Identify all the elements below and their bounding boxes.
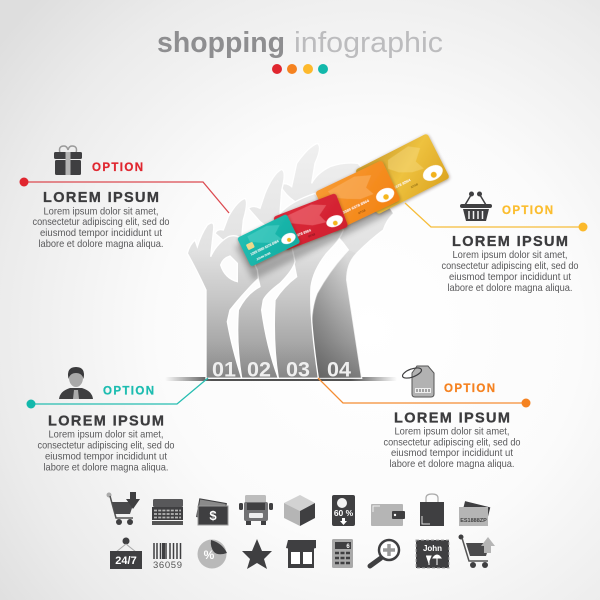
- panel: option orange: OPTION: [444, 383, 495, 395]
- hand 4: [280, 143, 393, 378]
- panel: option red: Lorem ipsum dolor sit amet,: [44, 206, 158, 218]
- icon: credit cards: [459, 501, 490, 526]
- icon: door hanger discount: 60 %: [334, 508, 354, 518]
- shading behind cards: [234, 199, 393, 282]
- panel: option teal: LOREM IPSUM: [48, 414, 164, 430]
- hands holding cards: [187, 143, 403, 378]
- icon: barcode: [153, 543, 182, 571]
- icon: cart with down arrow: [106, 492, 140, 525]
- icon: parcel label: John: [423, 544, 442, 553]
- icon: gift: [54, 146, 82, 175]
- icon: cart with up arrow: [458, 534, 495, 568]
- icon: parcel label: [416, 540, 449, 568]
- icon: banknotes: $: [209, 508, 217, 523]
- card 1 teal: [237, 214, 300, 267]
- card 4 yellow: 07/18: [410, 182, 419, 189]
- hand 2: [215, 198, 295, 378]
- card 3 orange: 1265 5589 6378 8564: [332, 198, 370, 219]
- panel: option orange: consectetur adipiscing elit, sed do: [384, 438, 521, 448]
- panel: option red: LOREM IPSUM: [43, 190, 159, 206]
- panel: option orange: eiusmod tempor incididunt ut: [391, 448, 513, 459]
- icon: cash register: [152, 499, 183, 525]
- panel: option teal: OPTION: [103, 386, 154, 398]
- step numbers: 01: [212, 358, 236, 382]
- panel: option teal: consectetur adipiscing elit, sed do: [38, 440, 175, 452]
- panel: option red: [20, 146, 229, 250]
- panel: option yellow: eiusmod tempor incididunt ut: [449, 272, 571, 283]
- icon: star: [242, 539, 272, 569]
- panel: option orange: LOREM IPSUM: [394, 410, 510, 426]
- icon: shopping bag: [420, 494, 444, 526]
- hand 3: [248, 169, 343, 378]
- icon row 2: [110, 534, 495, 571]
- icon: basket: [460, 192, 492, 221]
- card 3 orange: 07/18: [358, 208, 366, 215]
- card 3 orange: [315, 160, 401, 232]
- icon: door hanger discount: [332, 495, 355, 526]
- panel: option yellow: Lorem ipsum dolor sit amet,: [452, 250, 568, 261]
- hand 4 arm shading: [312, 250, 362, 378]
- panel: option red: consectetur adipiscing elit, sed do: [32, 217, 170, 228]
- card 2 red: 6378 8564: [295, 228, 312, 238]
- icon: truck: [239, 495, 273, 525]
- icon: shop: [286, 540, 316, 568]
- icon: calculator: [332, 539, 353, 568]
- panel: option orange: labore et dolore magna aliqua.: [390, 459, 514, 470]
- panel: option teal: [26, 367, 208, 474]
- icon: businessman: [59, 367, 93, 399]
- icon: banknotes: [197, 499, 228, 525]
- panel: option yellow: LOREM IPSUM: [452, 234, 568, 250]
- icon: percent sticker: %: [204, 548, 215, 562]
- panel: option yellow: [405, 192, 588, 294]
- card 4 yellow: 6378 8564: [392, 177, 412, 190]
- panel: option red: eiusmod tempor incididunt ut: [40, 228, 162, 239]
- icon: credit cards: ES1888ZP: [460, 518, 487, 524]
- title: [157, 27, 443, 59]
- panel: option yellow: labore et dolore magna aliqua.: [448, 283, 572, 294]
- icon: 24/7 sign: [110, 538, 142, 569]
- panel: option teal: Lorem ipsum dolor sit amet,: [48, 430, 164, 440]
- card 4 yellow: [355, 133, 450, 215]
- icon row 1: [106, 492, 490, 526]
- ground shadow: [165, 377, 397, 381]
- step numbers: [212, 358, 351, 382]
- step numbers: 02: [247, 358, 271, 382]
- icon: price tag: [401, 366, 434, 397]
- icon: 24/7 sign: 24/7: [115, 555, 137, 567]
- panel: option red: labore et dolore magna aliqua.: [38, 239, 164, 250]
- panel: option teal: labore et dolore magna aliqua.: [44, 462, 168, 474]
- card 2 red: [273, 193, 348, 251]
- panel: option orange: [318, 366, 530, 470]
- title: infographic: [294, 27, 443, 59]
- card 1 teal: 1265 5589 6378 8564: [250, 239, 280, 256]
- panel: option orange: Lorem ipsum dolor sit amet,: [394, 426, 510, 438]
- icon: box: [284, 495, 315, 526]
- title: shopping: [157, 27, 285, 59]
- panel: option teal: eiusmod tempor incididunt ut: [45, 452, 167, 462]
- icon: barcode: 36059: [153, 560, 182, 571]
- title colour dots: [272, 64, 328, 74]
- panel: option red: OPTION: [92, 162, 143, 174]
- panel: option yellow: consectetur adipiscing elit, sed do: [442, 261, 579, 272]
- step numbers: 04: [327, 358, 351, 382]
- icon: calculator: 6: [346, 544, 350, 550]
- icon: wallet: [371, 504, 405, 526]
- hand 1: [187, 223, 258, 378]
- icon: percent sticker: [198, 540, 227, 568]
- card 1 teal: JOHN DOE: [256, 251, 271, 261]
- card 2 red: 07/18: [308, 232, 316, 238]
- panel: option yellow: OPTION: [502, 205, 553, 217]
- step numbers: 03: [286, 358, 310, 382]
- icon: magnifier plus: [370, 540, 399, 566]
